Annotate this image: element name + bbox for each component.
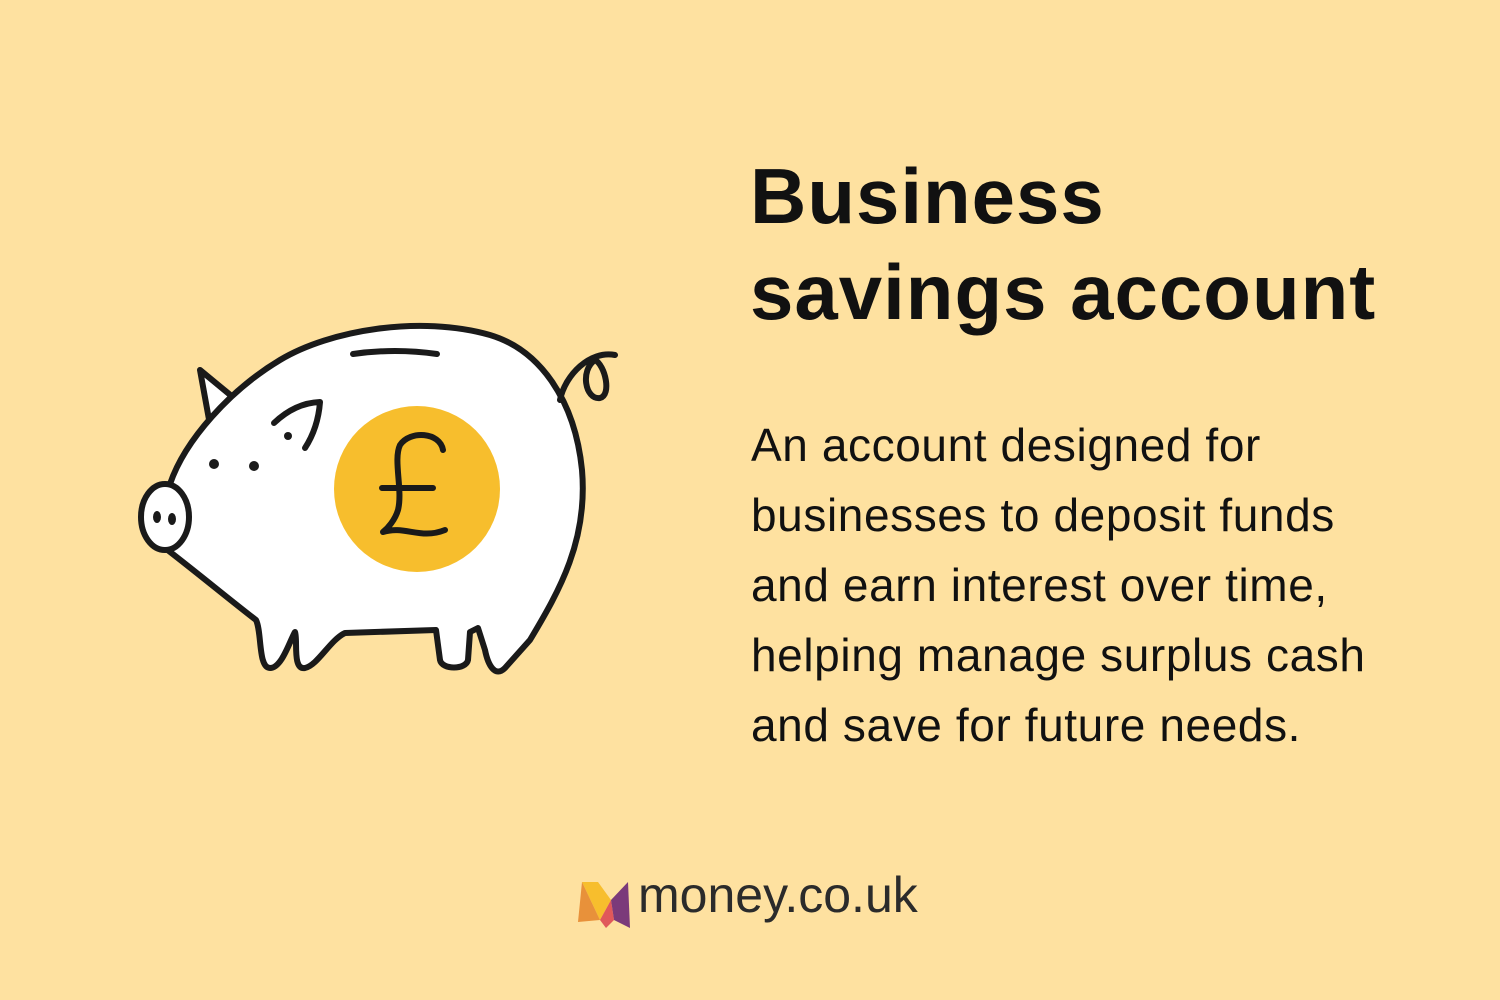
description text	[751, 419, 1366, 751]
title: Business	[750, 152, 1105, 240]
icon: piggy bank	[138, 322, 618, 674]
description text: businesses to deposit funds	[751, 489, 1335, 541]
title: savings account	[750, 248, 1376, 336]
description text: helping manage surplus cash	[751, 629, 1366, 681]
icon: pound coin	[334, 406, 500, 572]
description text: and save for future needs.	[751, 699, 1301, 751]
title	[750, 152, 1376, 336]
description text: and earn interest over time,	[751, 559, 1328, 611]
logo: money.co.uk: money.co.uk	[638, 867, 918, 923]
description text: An account designed for	[751, 419, 1261, 471]
